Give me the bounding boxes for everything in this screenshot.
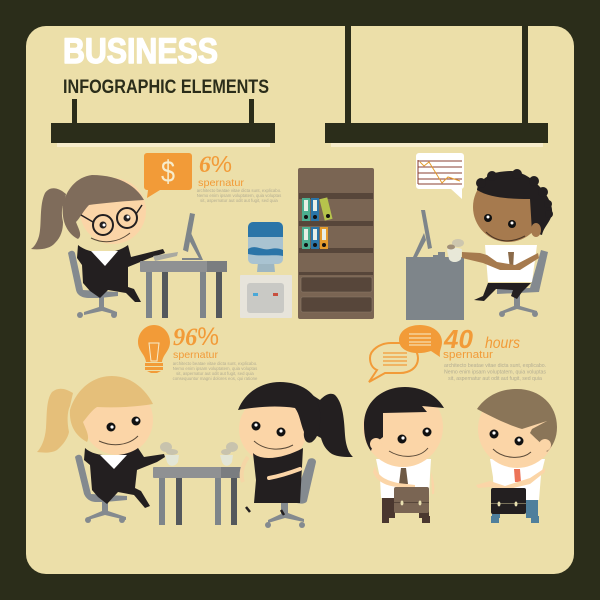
ceiling lamp left [51, 99, 275, 147]
icon: light bulb [138, 325, 170, 373]
stat text 40 hours [444, 363, 546, 382]
stat: 40 hours: spernatur [443, 349, 493, 361]
stat: 6%: spernatur [198, 177, 245, 189]
stat: 96%: spernatur [173, 349, 219, 361]
character: man with brown briefcase [363, 387, 444, 523]
stat text 96%: Nemo enim ipsam voluptatem, quia voluptas [173, 366, 257, 371]
stat text 40 hours: architecto beatae vitae dicta sunt, explicabo. [444, 363, 546, 369]
stat text 6%: architecto beatae vitae dicta sunt, explicabo. [197, 188, 281, 193]
water cooler [240, 222, 292, 318]
stat text 40 hours: Nemo enim ipsam voluptatem, quia voluptas [444, 370, 546, 376]
icon: dollar speech bubble: $ [161, 154, 175, 189]
character: blonde woman [37, 376, 165, 523]
stat text 6% [197, 188, 281, 203]
stat text 6%: Nemo enim ipsam voluptatem, quia voluptas [197, 193, 281, 198]
stat text 96%: sit, aspernatur aut odit aut fugit, sed quia [176, 371, 254, 376]
character: man with curly hair [447, 169, 553, 317]
character: dark-haired woman [238, 382, 353, 528]
stat: 6%: 6% [199, 151, 232, 177]
stat: 40 hours [443, 324, 520, 361]
character: man with black briefcase [476, 389, 557, 523]
character: woman with glasses [31, 175, 165, 318]
table with cups [153, 442, 242, 525]
bookshelf with binders [298, 168, 374, 319]
stat text 96% [173, 361, 258, 381]
stat text 96%: consequuntur magni dolores eos, qui ratione [173, 376, 258, 381]
stat: 40 hours: hours [485, 335, 520, 352]
stat: 96%: 96% [173, 323, 219, 351]
stat: 40 hours: 40 [443, 324, 473, 354]
stat text 96%: architecto beatae vitae dicta sunt, explicabo. [173, 361, 257, 366]
icon: two chat bubbles [369, 325, 442, 382]
desk and monitor right [406, 210, 464, 320]
title: BUSINESS [63, 32, 218, 71]
stat text 40 hours: sit, aspernatur aut odit aut fugit, sed quia [448, 376, 542, 382]
subtitle: INFOGRAPHIC ELEMENTS [63, 77, 269, 98]
ceiling lamp right [325, 26, 548, 147]
icon: dollar speech bubble [144, 153, 192, 198]
stat: 6% [198, 151, 245, 189]
stat text 6%: sit, aspernatur aut odit aut fugit, sed quia [200, 198, 278, 203]
icon: chart speech bubble [416, 153, 464, 199]
desk with computer [140, 213, 227, 318]
